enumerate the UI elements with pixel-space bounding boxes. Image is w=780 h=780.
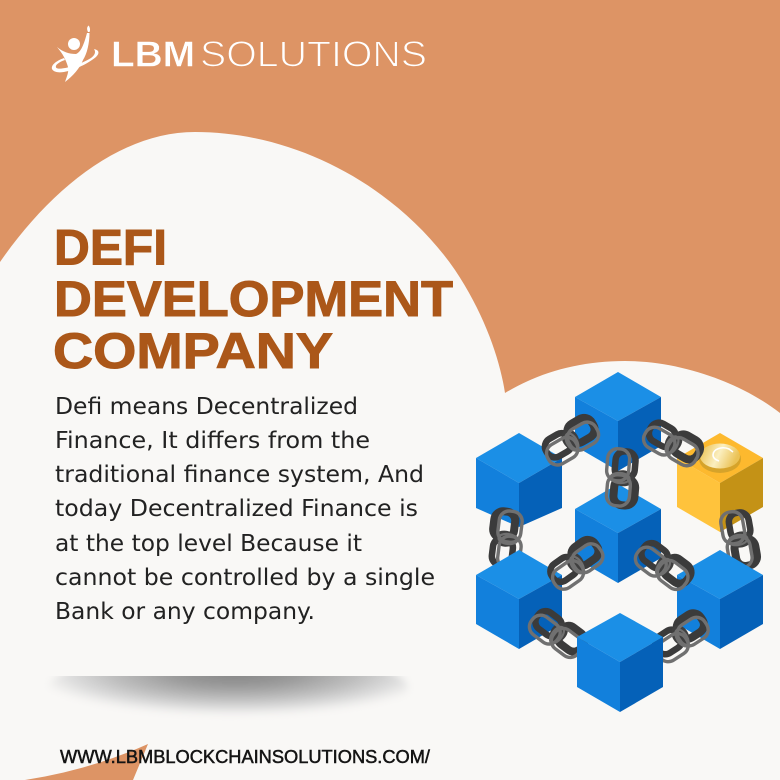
body text: cannot be controlled by a single — [55, 563, 435, 591]
cube: yellow with coin — [677, 433, 763, 532]
cube: top — [575, 372, 661, 471]
cube: lower right — [677, 550, 763, 649]
icon: logo figure — [52, 26, 98, 82]
blockchain illustration — [476, 372, 763, 712]
icon: coin — [699, 444, 741, 473]
cube: bottom — [577, 613, 663, 712]
cube: lower left — [476, 550, 562, 649]
chain: lower right — [631, 537, 695, 595]
chain: lower left — [544, 536, 608, 593]
heading: DEFI — [54, 219, 167, 275]
cube: centre — [575, 484, 661, 583]
heading — [53, 219, 453, 379]
chain: right vertical — [719, 509, 759, 570]
body text: traditional finance system, And — [55, 460, 424, 488]
logo wordmark SOLUTIONS: SOLUTIONS — [200, 34, 427, 74]
body text: today Decentralized Finance is — [55, 494, 418, 522]
cube: left — [476, 433, 562, 527]
chain: bottom right — [649, 609, 713, 666]
heading: COMPANY — [53, 323, 333, 379]
shadow ellipse — [54, 676, 406, 714]
body text: Bank or any company. — [55, 597, 315, 625]
chain: centre vertical — [604, 448, 638, 507]
logo wordmark LBM: LBM — [111, 34, 195, 74]
body text: Defi means Decentralized — [55, 392, 358, 420]
chain: left vertical — [489, 509, 525, 569]
body text: Finance, It differs from the — [55, 426, 370, 454]
logo — [52, 26, 427, 82]
body text — [55, 392, 435, 625]
website url: WWW.LBMBLOCKCHAINSOLUTIONS.COM/ — [60, 747, 430, 767]
chain: top right — [640, 417, 704, 471]
heading: DEVELOPMENT — [54, 271, 453, 327]
chain: top left — [539, 414, 603, 469]
body text: at the top level Because it — [55, 529, 362, 557]
chain: bottom left — [525, 605, 589, 663]
